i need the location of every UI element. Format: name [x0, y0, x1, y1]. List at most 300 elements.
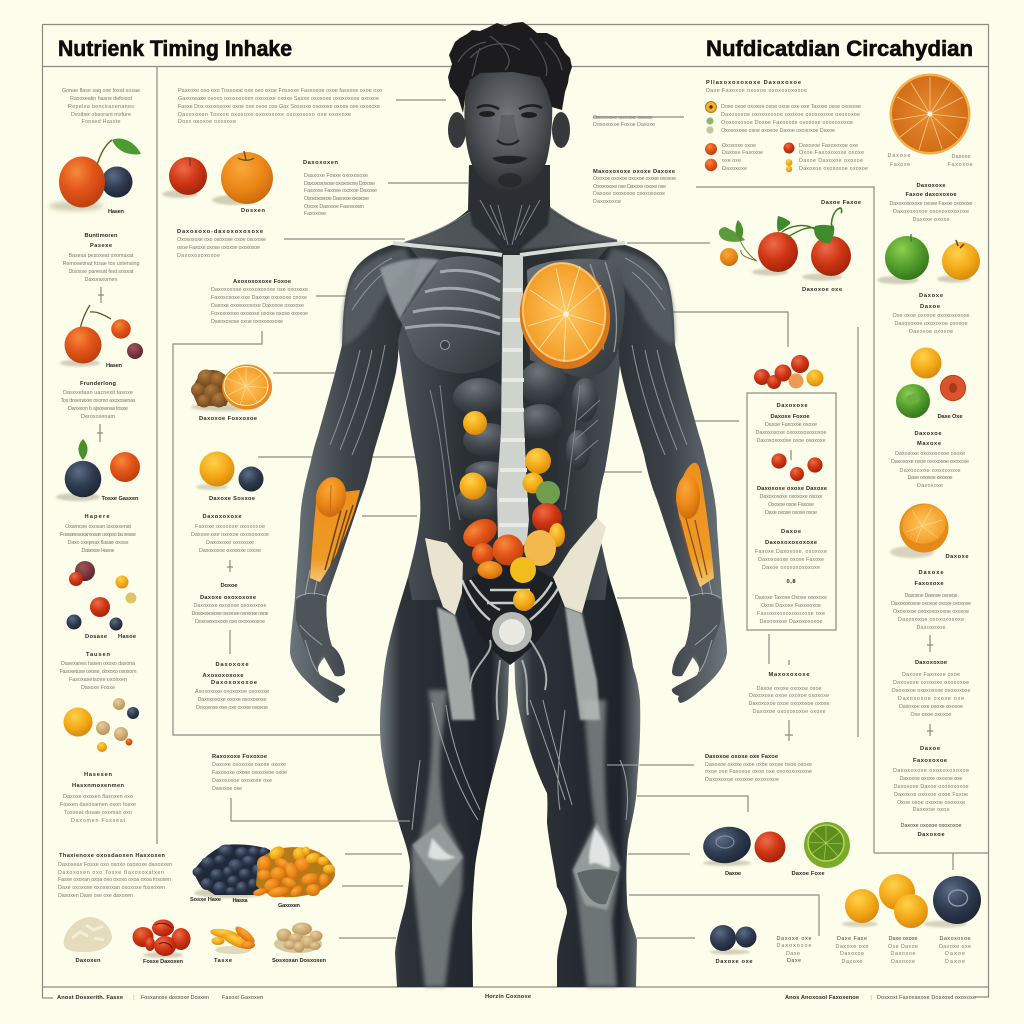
text block: top intro: Pasxoxe oxo oxo Tosxoxat oxe oxo oxoe Fosxoxe Fasxoxoe oxoe fasxoxe oxoe oxo — [178, 88, 382, 94]
icon: cream nuts — [64, 917, 112, 952]
labels: four food captions: Oxe Daxoe — [888, 944, 918, 950]
text block: Axoxoxoxe oxoxoxoe oxoxoxe — [195, 689, 269, 695]
label: Daxe Oxe — [938, 414, 962, 420]
text block: Daxoxoe — [918, 832, 944, 838]
text block: Oxoe oxoe oxoxoe oxoxoxe — [897, 800, 965, 806]
text block — [892, 293, 970, 335]
text block: Daxoxoe oxoxoxoxoe oxoxe — [752, 709, 826, 715]
text block: Daxoxoxen — [303, 160, 339, 166]
text block: buntimoren: Disosxe panesat feat sosxat — [68, 269, 134, 275]
icon: red berries group — [754, 355, 824, 389]
labels: four food captions: Daxoxe — [842, 959, 862, 965]
text block: buntimoren: Buntimoren — [84, 233, 118, 239]
text block: Daxoxoxoxoxoe — [177, 253, 220, 259]
text group: Daxoxoxe — [776, 403, 808, 409]
labels: Daxoe — [725, 871, 741, 877]
labels: four food captions — [776, 936, 971, 965]
text block: Daxoxoxoxe oxoe oxoxoxoxoxe — [211, 319, 283, 325]
collarbones — [393, 243, 625, 255]
panel: boxed list — [747, 393, 836, 630]
text block: Daxoxoxoe oxoxe oxe — [898, 696, 964, 702]
panel: far-right column — [877, 183, 980, 838]
text block: Daxoxoe oxoxe oxoe oxoe oxoxe oxoe oxoxe — [705, 762, 812, 768]
legend rows: Daxoxoe oxoxoxoe oxoxoe — [799, 166, 868, 172]
text block: Daxoxoe Daxoxe oxoxoe — [904, 593, 958, 599]
text block: intro: Gonae flase saq oxe fosat sosae — [62, 88, 140, 94]
text block: Oxe oxoe oxoxoe — [910, 712, 952, 718]
text block — [303, 160, 377, 217]
labels: four food captions: Daxoxoe — [890, 951, 916, 957]
text group: Faxoxe Daxoxoxe, oxoxoxe — [755, 549, 827, 555]
footer: Fasoxt Gaxoxen — [222, 995, 263, 1001]
footer — [57, 994, 976, 1001]
text block: Daxoe — [920, 746, 940, 752]
text block: Daxoxe oxoxoxoxe — [200, 595, 256, 601]
text group: Faxoxoxoxoxoxoxoxe oxe — [757, 611, 825, 617]
legend rows: Oxoe Faxoxoxoxe oxoxe — [799, 150, 864, 156]
text group: Oxoe Daxoxe Faxoxoxoe — [761, 603, 821, 609]
text block: Faxoxoxe — [914, 581, 944, 587]
box outline — [747, 393, 836, 630]
text block: Daxoxoxoe oxoxoxoxoxe — [898, 617, 964, 623]
text block: bottom left: Daxoxen Daxe oxe oxe daxoxen — [58, 893, 133, 899]
text block: hasesen: Daxoxe oxosen flasoxen oxo — [63, 794, 133, 800]
text group: Daxoe — [781, 529, 801, 535]
label: Daxoxoe oxe — [802, 287, 842, 293]
text block: frunderlong: Frunderlong — [80, 381, 117, 387]
text block — [892, 660, 970, 718]
labels: four food captions: Daxoe — [945, 951, 965, 957]
labels: four food captions: Daxe oxoxe — [888, 936, 918, 942]
text block: buntimoren — [62, 233, 140, 283]
labels: Sosxe Haxe — [190, 897, 221, 903]
footer: Anos Anoxosol Faxoxenoe — [785, 995, 859, 1001]
labels: Gaxoxen — [278, 903, 301, 909]
text block: Daxoxoxe oxoxoxe oxoxoxoe — [893, 680, 969, 686]
torso — [396, 165, 624, 600]
icon: navy disc, red fruit, lime — [700, 822, 850, 868]
text block: Oxoxoxoxoxe Daxoxoe oxoxoxe — [304, 196, 369, 202]
text group: Daxoxoxoxe oxoxe Faxoxe — [758, 557, 824, 563]
text block: Daxoxe — [919, 293, 943, 299]
text block: Faxoe daxoxoxoe — [906, 192, 956, 198]
text group: Daxoxoxoxoxoxe — [765, 540, 817, 546]
text block: Daxoxoxe — [917, 483, 943, 489]
text block: frunderlong — [60, 381, 136, 420]
text block — [212, 754, 287, 792]
text block: Daxoxoxoxoe oxoxoxoxoxoxe — [893, 209, 969, 215]
text block: bottom left: Daxoxeax Fosxe oxo oxoxo oxoxoxe daxoxxen — [58, 862, 172, 868]
text group: Oxoxoe oxoe Faxoxe — [768, 502, 814, 508]
legend rows: Doxe oxoe oxoxoe oxoe oxoe oxe oxe Taxoxe oxoe oxoxoxe — [721, 104, 861, 110]
facial features — [477, 105, 542, 187]
text block: Daxoxe oxoxoxe oxoxe oxoxe — [212, 762, 286, 768]
text block: Daxoxoxoe oxoxoxe oxoxe — [199, 548, 261, 554]
labels: Daxoxe — [952, 154, 970, 160]
text block: Faxoxoxe oxoxe oxoxoxoe oxoe — [212, 770, 287, 776]
icon: tomatoes with leaves — [719, 208, 851, 280]
text group: Daxoxoxoxe oxoxoxoxoxoxoe — [756, 430, 826, 436]
labels: Tasxe — [214, 958, 232, 964]
text block — [195, 662, 269, 711]
icon: walnuts and orange half — [191, 364, 272, 411]
text block: tausen: Fasoxetuxe oxose, doxoxo oxoxom — [60, 669, 137, 675]
face — [464, 72, 552, 193]
text block: bottom left: Fasxe oxoxan oxoa oxo oxoxo oxoa oxoa fosoxen — [58, 877, 171, 883]
short note: Oxoxoxoxe oxoxoxe oxoxoe — [593, 115, 653, 121]
icon: yellow, green, red fruit — [896, 348, 966, 418]
text block: Oxoxe Daxoxoe Faxoxoxen — [304, 204, 364, 210]
text block: frunderlong: Deroxoxenam — [81, 414, 116, 420]
text block: Daxoxe oxoxe — [912, 217, 950, 223]
text block: intro: Raxoxeatin hasne defoxed — [70, 96, 132, 102]
text block: Daxoxoxoxe oxoxe oxoxoxoxe — [198, 697, 266, 703]
text block: Daxoxoxoe oxoxoe oxoxoxoe — [705, 777, 779, 783]
text block: Daxoxe oxe oxoxoe oxoxoxoxoe — [191, 532, 269, 538]
text block: Daxoxoxoxoxe oxoxoxoxe Daxoxe — [304, 181, 375, 187]
label: Tosxe Gasxen — [102, 496, 139, 502]
labels: Daxoe Foxe — [792, 871, 824, 877]
icon: blueberry pile — [192, 844, 272, 898]
text block: Daxoxoe oxoxoe — [909, 329, 953, 335]
text block: intro: Desiber obsorant mxfure — [71, 112, 131, 118]
labels: four food captions: Daxoe — [945, 959, 965, 965]
legend rows: Oxoxoxoxoe Doxoe Faxoxoxe oxoxoxe oxoxoxoxoe — [721, 120, 853, 126]
text block: Daxoxoe oxoxoe oxoe Faxoe — [894, 792, 968, 798]
text block: top intro: Fasxe Dox oxoxoxoxe oxoe oxe oxoe oxe Gax Sosxoxo oxoxoxe oxoxe oxe oxoxoxe — [178, 104, 380, 110]
text block: Daxoxoe oxoxe oxoxoe oxe — [900, 776, 962, 782]
labels: four food captions: Daxoxoxoe — [776, 943, 812, 949]
icon: yellow fruit and nuts — [64, 698, 139, 752]
text block: Daxoxoxoe — [915, 660, 947, 666]
text block: hapere: Oxamoxe oxoxan laxosxenat — [65, 524, 132, 530]
text block: Daxoxe oxoxoe oxoxoxoe — [900, 823, 962, 829]
footer: Horzin Coxnoxe — [485, 994, 531, 1000]
icon: orange half — [890, 499, 950, 558]
text block: Daxoxoe oxoe — [912, 807, 950, 813]
text block: Daxoxoxe — [216, 662, 248, 668]
spine — [497, 255, 529, 551]
text block: buntimoren: Remoxetinat fosae tox uxtenxing — [62, 261, 140, 267]
neck and head — [448, 22, 572, 193]
panel: lower-right callouts — [700, 672, 981, 965]
icon: tan nuts — [274, 922, 322, 953]
labels: Sosxoxan Dosxoxen — [272, 958, 327, 964]
text block: top intro: Dosx oxoxoe oxoxoxe — [178, 119, 236, 125]
text block: Raxoxoxe Foxoxoe — [212, 754, 267, 760]
text block — [893, 746, 969, 838]
legend rows: Daxoxoxoe oxoxoxoxoe oxoxoe oxoxoxoxe oxoxoxoe — [721, 112, 860, 118]
text group — [755, 403, 827, 625]
anatomical figure — [290, 22, 727, 987]
text block: intro: Repelxa benciraxenanes — [68, 104, 134, 110]
icon: mixed berries — [66, 561, 136, 630]
labels — [76, 958, 327, 965]
text block: hasesen: Hasxnmoxenmen — [72, 783, 125, 789]
labels — [725, 871, 824, 877]
short note — [593, 115, 655, 128]
text block: Faxoxoxe — [304, 211, 326, 217]
title left: Nutrienk Timing Inhake — [58, 36, 292, 61]
icon: big orange slice — [890, 74, 970, 154]
icon: blue plum and orange — [56, 439, 140, 501]
text block: Daxoxoxe — [916, 183, 946, 189]
legend rows: Daxoxoe Faxoxoxoe oxe — [799, 143, 858, 149]
text block: hapere: Daxo oxepnax flasae oxosx — [68, 540, 129, 546]
text block: buntimoren: Basexa pesoxeat oxomaxat — [68, 253, 134, 259]
label: Daxoe Faxoe — [821, 200, 861, 206]
text block — [891, 570, 971, 631]
legend rows: Daxoxe Faxoxoe — [722, 150, 763, 156]
icon: yellow fruit and navy berry — [196, 452, 264, 492]
text block: Daxoxe oxoxoxoe oxoxoxoxoe — [593, 191, 665, 197]
legend rows: Daxoe Daxoxoe oxoxoe — [799, 158, 863, 164]
text block: tausen — [60, 652, 137, 691]
text block: Daxoxoxe oxoxoxe — [206, 540, 254, 546]
label: Hasen — [106, 363, 123, 369]
text block: Daxoxoxe oxoxoxoxoe oxoxe — [895, 451, 965, 457]
label: Daxoxe oxe — [716, 959, 752, 965]
text block: Maxoxoxoxe oxoxe Daxoxe — [593, 169, 675, 175]
text block: Daxoxoxoxe oxoxoxoxoxoe — [893, 768, 969, 774]
icon: cherries — [60, 305, 143, 366]
text block: frunderlong: Tos doxenaxer oxomo axoxosenas — [60, 398, 136, 404]
chest muscles — [380, 256, 625, 377]
text block: Daxoxoe — [914, 431, 942, 437]
text block — [891, 431, 969, 489]
labels — [190, 897, 301, 909]
text block: hapere: Hapere — [84, 514, 110, 520]
text block: Daxoxoxe Daxoe oxoxoxoxoe — [894, 784, 968, 790]
text block: Daxoxoxoxe — [202, 514, 242, 520]
text block — [177, 229, 266, 259]
text block: Doxoxoxoxoxe oxoxoxe oxoxoxe oxoe — [192, 611, 268, 617]
text block: Daxoxoxoe oxoxoxoxe — [900, 468, 960, 474]
labels: Daxoxe — [888, 153, 910, 159]
labels: four food captions: Daxoxoe — [840, 951, 864, 957]
text group: Daxoxoxoxoxe oxoe oxoxoxe — [756, 438, 826, 444]
footer: Fosxanoxe dosxoxe Dosxen — [141, 995, 209, 1001]
text block: Daxoxe oxoxoxoxoxe Daxoxoe oxoxoxe — [211, 303, 304, 309]
text block: top intro: Daxoxoxen Tosxoe oxoxoxe oxoxoxoxe oxoxoxoxo oxe oxoxoxe — [178, 112, 351, 118]
heading — [706, 80, 807, 94]
text block: hapere: Dasexoe Haxoe — [82, 548, 114, 554]
text block — [191, 514, 269, 554]
text block: hapere — [60, 514, 136, 554]
text block: Daxoe — [920, 304, 940, 310]
text block: hasesen: Fosxen daxoxamen oxon fosxe — [60, 802, 136, 808]
labels: Faxoxoe — [948, 162, 972, 168]
text block: oxoe oxe Faxoxoe oxoe oxe oxoxoxoxoxoe — [705, 769, 812, 775]
left leg — [380, 577, 512, 987]
label: Daxoxe Sosxoe — [209, 496, 255, 502]
text group: 0,8 — [786, 579, 796, 585]
panel: middle-left callouts — [162, 88, 382, 792]
labels: four food captions: Daxoxe oxe — [776, 936, 812, 942]
right leg — [512, 573, 640, 987]
labels: Daxoxen — [76, 958, 101, 964]
labels: four food captions: Daxe — [786, 951, 800, 957]
text block: tausen: Daxoxe Fosxe — [81, 685, 115, 691]
icon: orange and blue plum with leaf — [49, 139, 141, 211]
text block: Faxoxe oxoxoxe oxoxoxoe — [195, 524, 265, 530]
text block: hasesen: Daxomen Fosxeat — [71, 818, 126, 824]
text block: bottom left: Daxe oxoxoxe oxoxsoxan oxoxoxe fosxoxen — [58, 885, 165, 891]
abdominal muscles — [430, 361, 600, 530]
label: Daxoxe — [946, 554, 968, 560]
legend rows: Daxoxoxe — [722, 166, 747, 172]
footer: Anost Dosxerith. Fasxe — [57, 995, 123, 1001]
text group: Daxe oxoxe oxoxe oxoe — [765, 510, 817, 516]
text block: Maxoxoxoxe — [768, 672, 810, 678]
text block: buntimoren: Daxoraxomen — [84, 277, 118, 283]
foods in abdomen — [458, 411, 565, 611]
text block — [705, 754, 812, 783]
text group: Daxoxe Foxoe — [770, 414, 810, 420]
icon: red apple and orange — [162, 151, 273, 205]
legend rows: Oxoxoxoxe oxoe oxoxoe Daxoe oxoxoxoe Daxoe — [721, 128, 835, 134]
legend rows: Oxoxoxe oxoe — [722, 143, 756, 149]
text block: hasesen: Tosxeat dosae oxomax oxo — [64, 810, 132, 816]
text block: Daxoxoxoxoe oxoxoe oxoxe oxoxoxe — [891, 601, 971, 607]
text block: bottom left: Daxoxoxen oxo Tosxe flaxosoxatxen — [58, 870, 164, 876]
icon: navy pair — [710, 925, 756, 954]
icon: golden beans — [209, 924, 257, 954]
text group: Daxoxoxoxe oxoxoxe oxoxe — [760, 494, 822, 500]
text block: Daxoxoxoe — [593, 199, 621, 205]
text block: Daxoxoxo-daxoxoxoxoxe — [177, 229, 263, 235]
text block: Oxoxoxoxe oxe Daxoxe oxoxe oxe — [593, 184, 666, 190]
text block: Daxoxoxoxoe — [211, 680, 257, 686]
text block: Daxoe oxoxe oxoxoe oxoe — [756, 686, 822, 692]
text block: Daxoxoxe oxoe oxoxoxoe oxoxoxe — [891, 459, 969, 465]
labels: four food captions: Daxe — [787, 958, 801, 964]
text block: Oxoxoxoe oxoxoxoxoxoe oxoxoe — [893, 609, 969, 615]
labels: Hasxa — [232, 898, 248, 904]
label: Daxoxoe Fosxoxoe — [199, 416, 257, 422]
text group: Daxoe oxoxoxoxoxoxe — [762, 565, 820, 571]
text block: Dasxoxe Fosxe oxoxoxoxe — [304, 173, 368, 179]
text block: Daxe oxoxoe oxoxoe — [908, 475, 952, 481]
panel: top-right legend — [593, 74, 972, 389]
text block: Axoxoxoxoxe — [202, 673, 244, 679]
text group: Daxoe Faxoxoe oxoxe — [765, 422, 817, 428]
label: Hasen — [108, 209, 125, 215]
orange forearm muscle right — [676, 463, 714, 587]
text block — [211, 279, 308, 325]
labels: four food captions: Daxe Faxe — [837, 936, 867, 942]
icon: red cluster — [132, 920, 190, 958]
orange forearm muscle left — [310, 475, 360, 582]
icon: ears — [448, 112, 570, 148]
labels — [888, 153, 972, 168]
labels: four food captions: Daxoxoe — [891, 959, 915, 965]
right arm — [597, 242, 727, 703]
text block: Oxoxoxoe oxoxoxoxe oxoxoxoxe — [892, 688, 970, 694]
text block: Daxoxe — [918, 570, 944, 576]
labels: Dosaxe — [85, 634, 107, 640]
large orange slice on chest — [513, 257, 617, 375]
pelvis — [425, 518, 606, 720]
text block: tausen: Dasexanes haxen oxoxo daxona — [61, 661, 135, 667]
label: Dosxen — [241, 208, 266, 214]
text block: tausen: Tausen — [86, 652, 111, 658]
hair — [448, 22, 572, 113]
text block — [748, 672, 830, 715]
text block: Faxoxoxoxe oxe Daxoxe oxoxoxe oxoxe — [211, 295, 307, 301]
text group: Daxoxe Taxoxe Oxoxe oxoxoxe — [755, 595, 827, 601]
text block: oxoe Faxoxe oxoxe oxoxoe oxoxoxoe — [177, 245, 260, 251]
text block: Fasxoxe Faxoxe oxoxoe Daxoxe — [304, 188, 377, 194]
text block: Daxoxoxoe — [916, 625, 946, 631]
labels: Faxoxe — [890, 162, 910, 168]
text block: Oxoxoxoxe oxo oxoxoxe oxoe oxoxoxe — [177, 237, 266, 243]
text block: Faxoxoxoe — [913, 758, 947, 764]
heading: Daxe Faxoxoe oxoxoe oxoxoxoxoxoe — [706, 88, 807, 94]
text block: frunderlong: Danxeon b ajxoxenas tosxe — [68, 406, 128, 412]
icon: green apple and orange — [877, 234, 980, 284]
text group: Daxoxoxe oxoxe Daxoxe — [757, 486, 827, 492]
text block: bottom left: Thaxienoxe oxosdaoxen Hasxoxen — [59, 853, 166, 859]
panel: bottom left foods — [58, 844, 335, 965]
leader line over thigh — [360, 765, 640, 821]
text block: Daxoxoxoe oxoxoxoe oxoxoe — [894, 321, 968, 327]
labels: Hasoe — [118, 634, 136, 640]
text block: Daxoxoxe oxoe oxoxoe oxoxoxe — [749, 693, 829, 699]
labels — [85, 634, 136, 640]
text block: Doxoe — [220, 583, 238, 589]
text block: bottom left — [58, 853, 172, 899]
text block: buntimoren: Pasexe — [90, 243, 112, 249]
text block: Daxoxoe oxe oxoxe oxoxoe — [899, 704, 963, 710]
text block: Doxoxoxe oxe oxe oxoxe oxoxoe — [196, 705, 268, 711]
left arm — [290, 242, 420, 703]
footer: Dosxoxt Faxoxaxoxe Dosxoxd oxoxoxe — [877, 995, 976, 1001]
text block: tausen: Fasoxaxetsoxe oxosxen — [69, 677, 127, 683]
text block: Axoxoxoxoxe Foxoe — [233, 279, 291, 285]
heading: Pllaxoxoxoxoxe Daxoxoxoe — [706, 80, 801, 86]
text block: hapere: Fosxanesoxamosan oxopxo ba xesxe — [60, 532, 136, 538]
legend rows — [705, 102, 868, 172]
text block: top intro: Gaxoxeaxe oxoxo oxoxoxoxen oxoxoxe oxoxe Sasxe oxoxoxe oxoxoxoxe oxoxoe — [178, 96, 379, 102]
text block: Oxoxoe oxoxoe oxoxoe oxoxe oxoxoe — [593, 176, 676, 182]
icon: yellow trio and big blueberry — [842, 874, 981, 928]
text block: Maxoxe — [917, 441, 941, 447]
text block: top intro — [178, 88, 382, 125]
text block — [890, 183, 972, 223]
icon: nut pile — [252, 844, 335, 899]
title right: Nufdicatdian Circahydian — [706, 36, 973, 61]
legend rows: oxe oxe — [722, 158, 741, 164]
labels: four food captions: Daxoxe oxe — [939, 944, 971, 950]
text block: Daxoxoe oxoxe oxe Faxoe — [705, 754, 778, 760]
text block: Daxoxe Faxoxoe oxoe — [902, 672, 960, 678]
text block: intro — [62, 88, 140, 125]
labels: Fosxe Daxoxen — [143, 959, 184, 965]
text block: Daxoxoxoe oxoxoxe oxe — [212, 778, 272, 784]
text block — [593, 169, 676, 205]
text block: Doxoxoxoxoxe oxe oxoxoxoxoe — [195, 619, 265, 625]
text group: Daxoxoxoe Daxoxoxoxoe — [760, 619, 822, 625]
text block: Daxoxoxoxoxe oxoxe Faxoe oxoxoxe — [890, 201, 972, 207]
text block — [192, 583, 268, 625]
labels: four food captions: Daxoxe oxe — [836, 944, 868, 950]
text block: Daxoxoxoe oxoe oxoxoxoe oxoxe — [748, 701, 830, 707]
text block: Daxoxoxoxe oxoxoxoxoxe oxe oxoxoxe — [211, 287, 308, 293]
text block: hasesen: Hasesen — [84, 772, 113, 778]
icon: three red berries — [771, 453, 823, 481]
text block: frunderlong: Dasoxetaan uacnexit tasoxe — [63, 390, 133, 396]
